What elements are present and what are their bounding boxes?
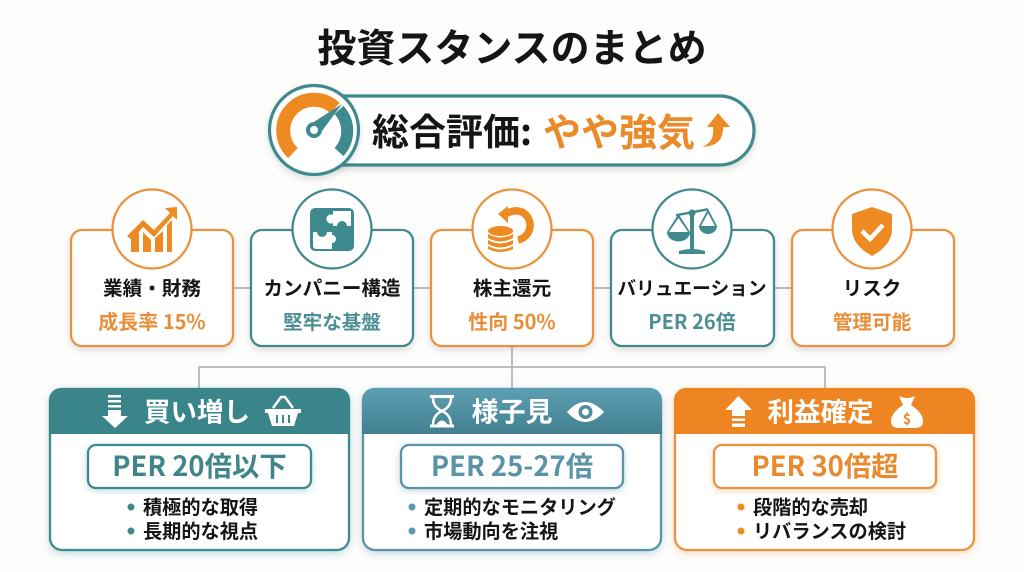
panel: リスク [792, 190, 954, 346]
header text: 利益確定 [768, 390, 874, 430]
condition pill: PER 30倍超 [751, 444, 899, 484]
bullet list [408, 492, 616, 544]
panel: 買い増し [49, 388, 350, 550]
heading: カンパニー構造 [263, 272, 401, 301]
header text: 買い増し [144, 390, 250, 430]
panel: 株主還元 [431, 190, 593, 346]
bullet list: 長期的な視点 [143, 516, 258, 544]
header bar [49, 388, 350, 434]
title: 投資スタンスのまとめ [317, 18, 707, 74]
condition pill [714, 444, 936, 488]
bullet list: 積極的な取得 [143, 492, 258, 520]
icon: eye [567, 402, 604, 422]
rating value: やや強気 [543, 102, 695, 157]
icon: coins and return arrow [488, 206, 530, 252]
value: 性向 50% [468, 306, 556, 335]
header bar [362, 388, 662, 434]
heading: バリュエーション [617, 274, 767, 301]
value: 堅牢な基盤 [283, 306, 381, 335]
icon: up arrow [725, 396, 752, 427]
heading: 株主還元 [473, 272, 551, 301]
panel: カンパニー構造 [251, 190, 413, 346]
icon: gauge [270, 86, 358, 174]
panel: 様子見 [362, 388, 662, 550]
bullet list: 市場動向を注視 [424, 516, 558, 544]
header bar [674, 388, 975, 434]
icon: shield with check [852, 207, 892, 256]
value: 管理可能 [833, 306, 912, 335]
icon: money bag [891, 396, 923, 429]
icon: up arrow [702, 113, 730, 147]
panel: 業績・財務 [71, 190, 233, 346]
icon: down arrow [102, 395, 128, 428]
condition pill [401, 444, 623, 488]
heading: リスク [843, 272, 901, 301]
overall rating banner [270, 86, 754, 174]
condition pill: PER 20倍以下 [112, 444, 287, 484]
icon: money bag: $ [903, 409, 911, 429]
value: PER 26倍 [648, 306, 736, 335]
value: 成長率 15% [98, 306, 206, 335]
icon: growth chart [127, 207, 177, 252]
panel: バリュエーション [611, 190, 774, 346]
icon: basket [265, 397, 301, 426]
bullet list: リバランスの検討 [753, 516, 906, 544]
bullet list: 定期的なモニタリング [424, 492, 616, 520]
connector lines [199, 288, 825, 388]
header text: 様子見 [472, 390, 552, 430]
icon: puzzle [310, 208, 354, 251]
heading: 業績・財務 [103, 272, 201, 301]
bullet list [738, 492, 906, 544]
icon: balance scale [667, 208, 717, 254]
icon: hourglass [430, 396, 454, 426]
rating label: 総合評価: [372, 102, 532, 156]
bullet list: 段階的な売却 [753, 492, 868, 520]
condition pill: PER 25-27倍 [431, 444, 593, 484]
bullet list [128, 492, 258, 544]
panel: 利益確定 [674, 388, 975, 550]
